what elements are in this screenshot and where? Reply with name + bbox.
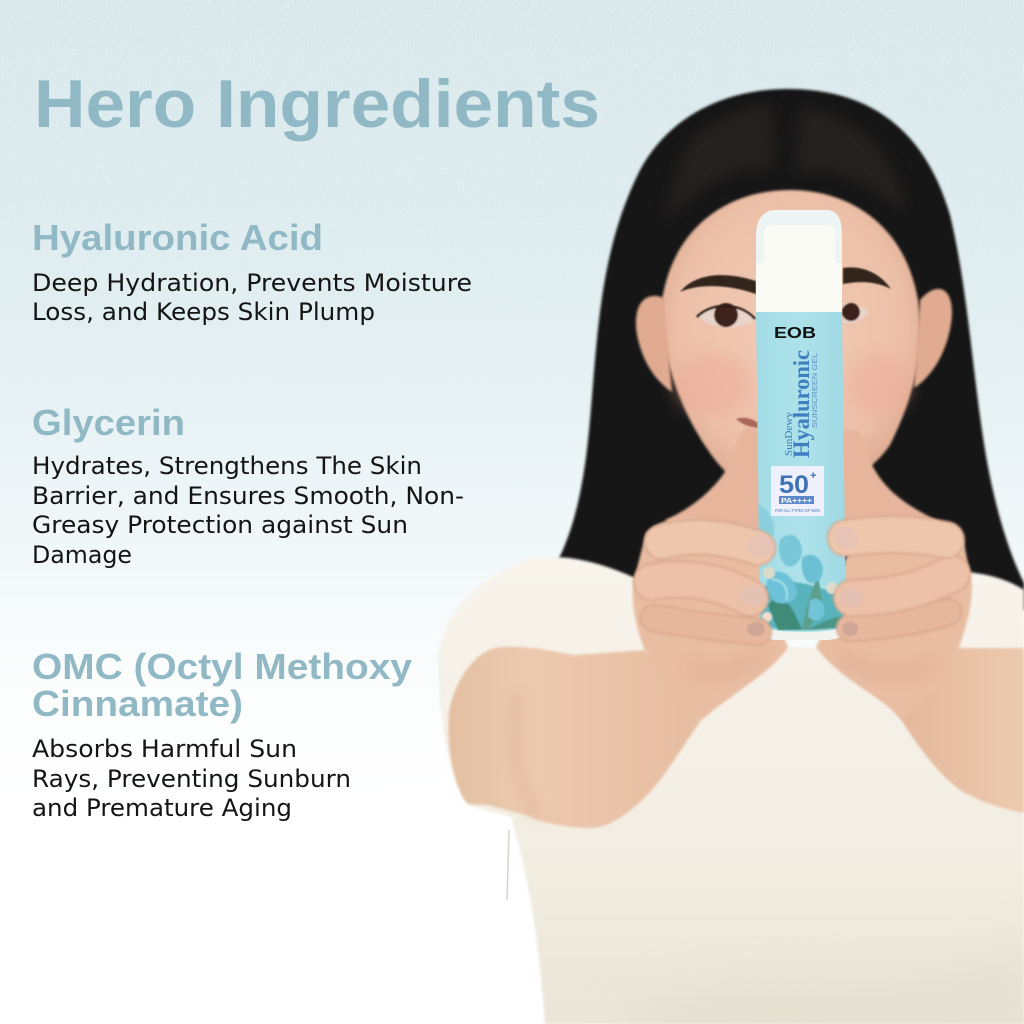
arm fold shading (515, 690, 538, 818)
bottle body (756, 312, 846, 640)
logo: EOB (774, 325, 816, 342)
ingredient: Glycerin (32, 402, 464, 569)
ingredient: Hyaluronic Acid: Loss, and Keeps Skin Plump (32, 298, 375, 326)
left thumb (665, 428, 762, 565)
right thumb (838, 430, 940, 565)
left eye (697, 303, 755, 327)
product name: SUNSCREEN GEL (812, 353, 819, 428)
left arm (448, 647, 700, 828)
person photo illustration (438, 89, 1024, 1024)
ingredient: Hyaluronic Acid: Deep Hydration, Prevents Moisture (32, 269, 472, 297)
product name (783, 350, 819, 458)
product name: Hyaluronic (789, 350, 814, 458)
right eyebrow (843, 267, 891, 289)
ingredient: OMC: Cinnamate) (32, 683, 243, 724)
ingredient: OMC: Rays, Preventing Sunburn (32, 765, 351, 793)
SPF badge: PA++++ (781, 496, 813, 505)
ingredient: Glycerin: Damage (32, 541, 132, 569)
right eye (842, 303, 869, 323)
SPF badge (771, 466, 824, 516)
left finger nails (739, 534, 773, 636)
product bottle (756, 210, 846, 640)
ingredient: OMC: OMC (Octyl Methoxy (32, 646, 412, 687)
product name: SunDewy (783, 411, 795, 456)
ears (636, 289, 952, 392)
shirt (438, 557, 1024, 1024)
right arm (880, 648, 1024, 813)
ingredient: Hyaluronic Acid: Hyaluronic Acid (32, 217, 323, 258)
title: Hero Ingredients (34, 66, 600, 142)
face (662, 190, 920, 495)
ingredient: OMC (32, 646, 412, 822)
ingredient: Glycerin: Hydrates, Strengthens The Skin (32, 452, 422, 480)
hair (555, 89, 1024, 610)
cheek blush (672, 353, 752, 417)
ingredient: Glycerin: Barrier, and Ensures Smooth, Non- (32, 482, 464, 510)
ingredient: Hyaluronic Acid (32, 217, 472, 326)
left eyebrow (680, 275, 756, 294)
palm crease shading (690, 655, 930, 674)
right hand fingers (846, 534, 952, 628)
background gradient (0, 0, 1024, 624)
ingredient: Glycerin: Glycerin (32, 402, 185, 443)
flowers (758, 505, 846, 630)
right finger nails (834, 527, 863, 636)
left palm (633, 518, 788, 722)
left hand fingers (652, 537, 758, 632)
lips (736, 418, 758, 428)
bottle base (760, 626, 846, 640)
bottle cap (756, 210, 842, 312)
hair strand (507, 830, 509, 900)
SPF badge: FOR ALL TYPES OF SKIN (775, 508, 820, 513)
ingredient: Glycerin: Greasy Protection against Sun (32, 511, 408, 539)
ingredient: OMC: Absorbs Harmful Sun (32, 735, 297, 763)
ingredient: OMC: and Premature Aging (32, 794, 292, 822)
right palm (816, 520, 972, 718)
hair sheen (665, 105, 905, 225)
SPF badge: + (810, 470, 816, 482)
shirt lower shadow (620, 940, 1024, 1024)
SPF badge: 50 (779, 471, 809, 499)
